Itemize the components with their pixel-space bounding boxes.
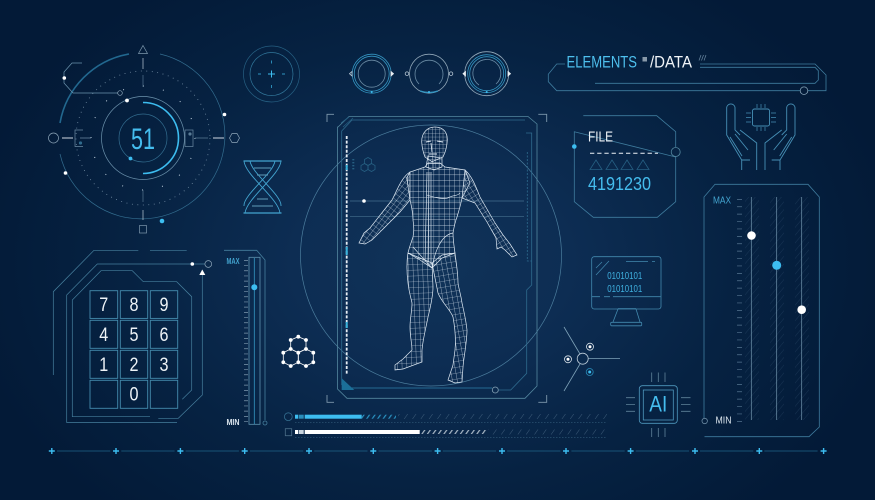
- frame bottom circle: [492, 387, 498, 393]
- blue corner triangle: [342, 378, 354, 390]
- scan line dot: [362, 199, 366, 203]
- bottom plus axis: [49, 448, 827, 454]
- frame corner brackets: [327, 114, 547, 402]
- multi slider knob three: [797, 305, 806, 314]
- left axis ticks: [62, 137, 73, 139]
- dial middle ring: [102, 96, 184, 180]
- vertical axis ticks: [142, 58, 144, 220]
- dial inner ring: [119, 114, 167, 162]
- ring icon one: [350, 54, 394, 93]
- monitor icon: [592, 257, 661, 326]
- callout connector: [64, 63, 118, 93]
- keypad digits: 5: [130, 325, 138, 346]
- title data text: /DATA: [650, 52, 693, 72]
- keypad digits: 6: [160, 325, 168, 346]
- keypad digits: 9: [160, 295, 168, 316]
- frame outer outline: [338, 116, 537, 398]
- left bracket: [75, 130, 91, 146]
- monitor stand: [613, 309, 640, 322]
- chip: [752, 109, 770, 126]
- figure left leg: [395, 253, 433, 370]
- figure torso: [407, 163, 470, 268]
- ring icon three: [463, 52, 510, 96]
- frame inner left line: [342, 120, 525, 385]
- ai chip inner: [643, 390, 673, 420]
- molecule icon: [281, 335, 315, 368]
- node white dots: [564, 343, 594, 363]
- slider max label: MAX: [226, 257, 240, 266]
- keypad digits: 2: [130, 355, 138, 376]
- right dim tick: [195, 137, 208, 139]
- title frame circle: [800, 87, 808, 94]
- dial sparse ticks: [91, 86, 195, 190]
- left hand: [727, 104, 757, 170]
- progress bars: [284, 413, 607, 437]
- multi slider end circle: [702, 418, 707, 424]
- keypad digits: 7: [99, 295, 108, 316]
- ai label: AI: [649, 392, 667, 416]
- title small square icon: [642, 57, 647, 62]
- node spokes: [564, 327, 620, 391]
- keypad keys: [90, 291, 178, 408]
- ring bottom dots: [371, 91, 488, 93]
- axis line: [57, 450, 819, 452]
- keypad connector end circle: [205, 261, 212, 267]
- keypad panel: [53, 250, 212, 422]
- bottom square marker: [140, 226, 146, 233]
- file panel blue dot: [572, 144, 577, 149]
- crosshair target: [244, 46, 300, 102]
- progress bar blue: [284, 413, 607, 422]
- frame right dashed column: [527, 152, 532, 261]
- monitor divider: [592, 296, 660, 298]
- keypad digits: 0: [130, 384, 138, 406]
- left bracket dot: [79, 141, 82, 145]
- slider min label: MIN: [226, 418, 240, 427]
- keypad arrow line: [158, 275, 202, 418]
- file dashed divider: [590, 152, 658, 154]
- node connector icon: [564, 327, 620, 391]
- multi slider min label: MIN: [716, 416, 732, 426]
- callout dot: [63, 76, 66, 80]
- multi slider knob one: [747, 231, 756, 240]
- title frame: [548, 64, 826, 91]
- node hub: [577, 353, 588, 364]
- human wireframe figure: [359, 127, 517, 383]
- right hexagon marker: [230, 134, 240, 142]
- keypad connector dot: [190, 262, 194, 266]
- ring icon two: [405, 54, 453, 93]
- file panel: [572, 116, 680, 217]
- monitor binary line one: 01010101: [607, 270, 642, 282]
- multi slider ticks: [737, 199, 742, 422]
- dial thick blue arc: [60, 54, 129, 123]
- monitor binary line two: 01010101: [607, 283, 642, 295]
- axis plus markers: [49, 448, 827, 454]
- slider outer line: [224, 250, 265, 420]
- monitor glass lines: [596, 261, 655, 275]
- right axis ticks: [213, 137, 224, 139]
- ai chip pins: [626, 372, 690, 437]
- slider frame: [249, 257, 260, 424]
- multi slider max label: MAX: [713, 196, 731, 206]
- progress bar white: [285, 429, 607, 437]
- title panel: [548, 52, 826, 94]
- keypad inner outline: [72, 271, 192, 417]
- chip pins: [746, 104, 776, 131]
- frame top left accent lines: [341, 117, 353, 127]
- file number: 4191230: [588, 174, 651, 194]
- multi slider knob two: [772, 261, 781, 270]
- node blue dot: [586, 368, 593, 376]
- keypad connector frame: [67, 264, 205, 422]
- dial outer ring: [60, 54, 225, 219]
- multi slider frame: [704, 184, 819, 437]
- keypad digits: 4: [99, 325, 109, 346]
- figure right arm: [462, 170, 517, 257]
- top triangle marker: [138, 46, 148, 54]
- dial progress arc: [143, 102, 178, 174]
- slider knob: [251, 284, 257, 290]
- left circle marker: [48, 133, 58, 143]
- keypad digits: [99, 295, 168, 406]
- vertical axis dim ticks: [142, 75, 144, 202]
- hands holding chip icon: [727, 104, 795, 170]
- body scan frame: [300, 114, 562, 402]
- ai chip body: [639, 386, 677, 423]
- title slashes: [699, 55, 706, 60]
- multi slider tracks: [751, 197, 802, 420]
- file panel circle: [671, 148, 680, 156]
- title elements text: ELEMENTS: [566, 52, 637, 72]
- figure head: [422, 127, 447, 162]
- slider track: [253, 258, 255, 424]
- small dot column: [352, 159, 354, 171]
- figure face detail: [426, 141, 443, 154]
- max min multi slider panel: [702, 184, 819, 437]
- file panel outline: [574, 116, 676, 217]
- blue ring dots: [129, 157, 164, 223]
- ai chip icon: [626, 372, 690, 437]
- figure chest and spine detail: [413, 172, 460, 268]
- monitor screen: [592, 257, 661, 309]
- figure right leg: [432, 253, 467, 383]
- figure left arm: [359, 172, 410, 244]
- figure neck: [426, 156, 442, 170]
- small hexagon cluster icon: [361, 158, 375, 172]
- keypad digits: 3: [160, 355, 168, 376]
- callout end circle: [118, 91, 122, 95]
- right bracket: [185, 130, 193, 146]
- dna helix icon: [244, 161, 282, 213]
- slider ticks: [244, 260, 248, 424]
- dial value: 51: [131, 123, 155, 156]
- file triangles: [590, 160, 649, 170]
- ring dots: [64, 99, 226, 175]
- ring icons row: [350, 52, 510, 96]
- monitor base: [611, 322, 642, 326]
- dial dotted ring: [76, 71, 210, 205]
- keypad digits: 8: [130, 295, 138, 316]
- keypad digits: 1: [99, 355, 108, 376]
- keypad arrow head: [199, 270, 205, 275]
- right bracket dot: [188, 132, 192, 136]
- frame inner right line: [498, 133, 532, 390]
- vertical measure column: [346, 136, 348, 375]
- multi slider hatch bands: [745, 197, 809, 420]
- right hand: [765, 104, 795, 170]
- radial dial gauge: [48, 46, 240, 233]
- slider end circle: [263, 421, 267, 425]
- file label: FILE: [588, 129, 613, 146]
- keypad frame lines: [53, 250, 187, 375]
- scan circle: [300, 125, 562, 386]
- horizontal scan lines: [350, 201, 524, 216]
- vertical max min slider: [224, 250, 267, 427]
- frame inner bottom line: [345, 387, 492, 389]
